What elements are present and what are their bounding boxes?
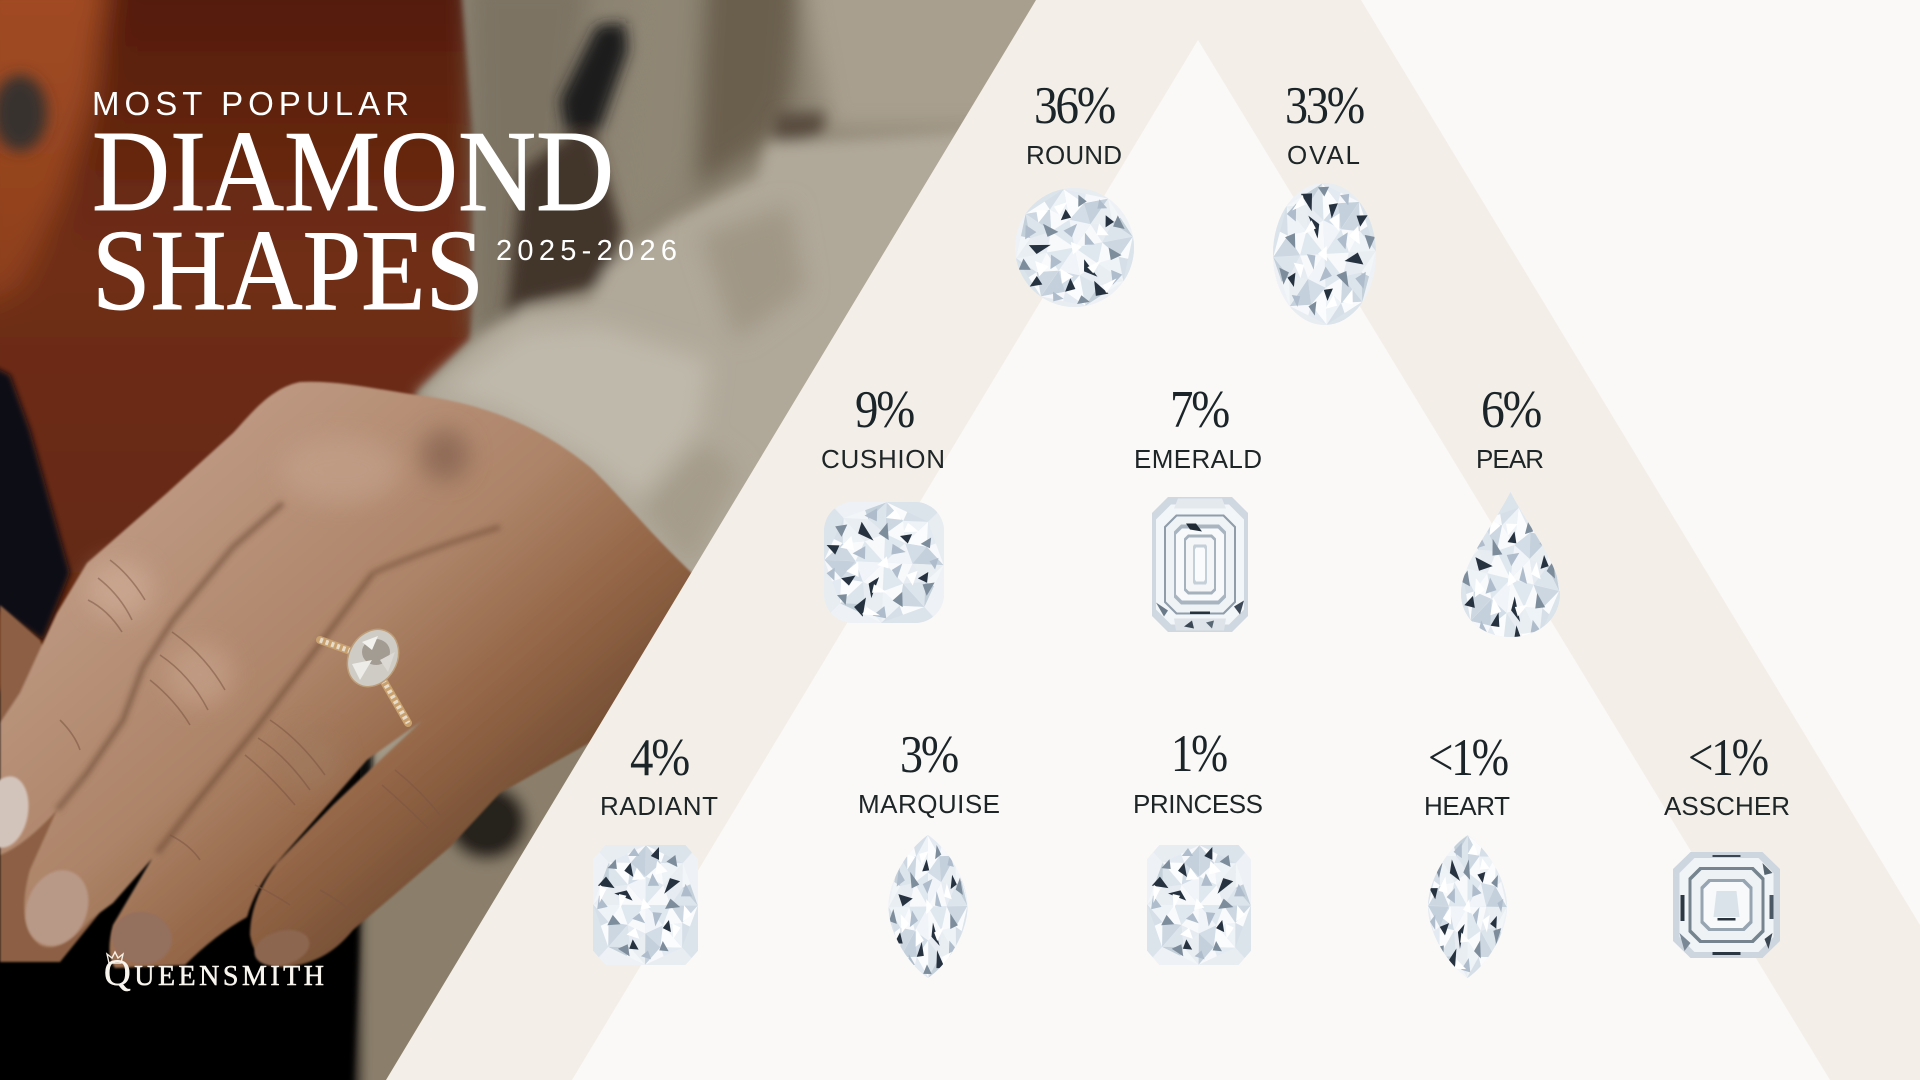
- item: oval 33%: [1273, 88, 1376, 325]
- icon: cushion diamond: [824, 502, 944, 623]
- icon: radiant diamond: [593, 845, 698, 965]
- ring: [320, 620, 409, 723]
- fingernails: [0, 773, 313, 972]
- inner off-white triangle: [572, 40, 1830, 1080]
- item: asscher under 1%: [1664, 729, 1790, 958]
- label: PEAR: [1476, 444, 1544, 474]
- percent: 7%: [1170, 381, 1229, 439]
- heading: diamond: DIAMOND: [92, 108, 614, 236]
- outer beige triangle: [386, 0, 1920, 1080]
- eyebrow: most popular: MOST POPULAR: [92, 85, 409, 122]
- label: EMERALD: [1134, 444, 1262, 474]
- icon: oval diamond: [1273, 183, 1376, 325]
- icon: asscher diamond: [1673, 852, 1780, 958]
- title block: [92, 85, 677, 335]
- percent: 1%: [1171, 725, 1227, 783]
- percent: 6%: [1481, 381, 1541, 439]
- label: MARQUISE: [858, 789, 1000, 819]
- icon: round diamond: [1015, 188, 1134, 307]
- item: princess 1%: [1135, 736, 1262, 965]
- item: pear 6%: [1461, 392, 1560, 637]
- icon: princess diamond: [1147, 845, 1251, 965]
- icon: heart-row diamond: [1428, 835, 1507, 978]
- finger separators and shading: [57, 503, 500, 853]
- percent: 33%: [1285, 77, 1364, 135]
- icon: pear diamond: [1461, 492, 1560, 637]
- label: HEART: [1424, 791, 1510, 821]
- label: CUSHION: [821, 444, 945, 474]
- wordmark: QUEENSMITH: [104, 953, 324, 994]
- percent: <1%: [1688, 729, 1768, 787]
- heading: shapes: SHAPES: [92, 207, 484, 335]
- percent: 9%: [855, 381, 914, 439]
- label: OVAL: [1287, 140, 1360, 170]
- percent: <1%: [1428, 729, 1508, 787]
- label: RADIANT: [600, 791, 718, 821]
- icon: emerald diamond: [1152, 497, 1248, 632]
- item: radiant 4%: [593, 740, 718, 965]
- label: PRINCESS: [1133, 789, 1263, 819]
- percent: 36%: [1034, 77, 1115, 135]
- label: ASSCHER: [1664, 791, 1790, 821]
- item: cushion 9%: [822, 392, 944, 623]
- photo: hand wearing oval diamond ring: [0, 0, 1070, 1080]
- item: round 36%: [1015, 88, 1134, 307]
- item: heart under 1%: [1426, 740, 1510, 978]
- hand: [0, 382, 710, 968]
- icon: marquise diamond: [888, 835, 968, 978]
- label: ROUND: [1026, 140, 1122, 170]
- icon: crown: [107, 952, 123, 963]
- logo: queensmith: [104, 952, 324, 994]
- item: emerald 7%: [1134, 381, 1262, 632]
- percent: 4%: [630, 729, 689, 787]
- percent: 3%: [900, 726, 958, 784]
- item: marquise 3%: [860, 736, 999, 978]
- year range: 2025-2026: [496, 235, 677, 267]
